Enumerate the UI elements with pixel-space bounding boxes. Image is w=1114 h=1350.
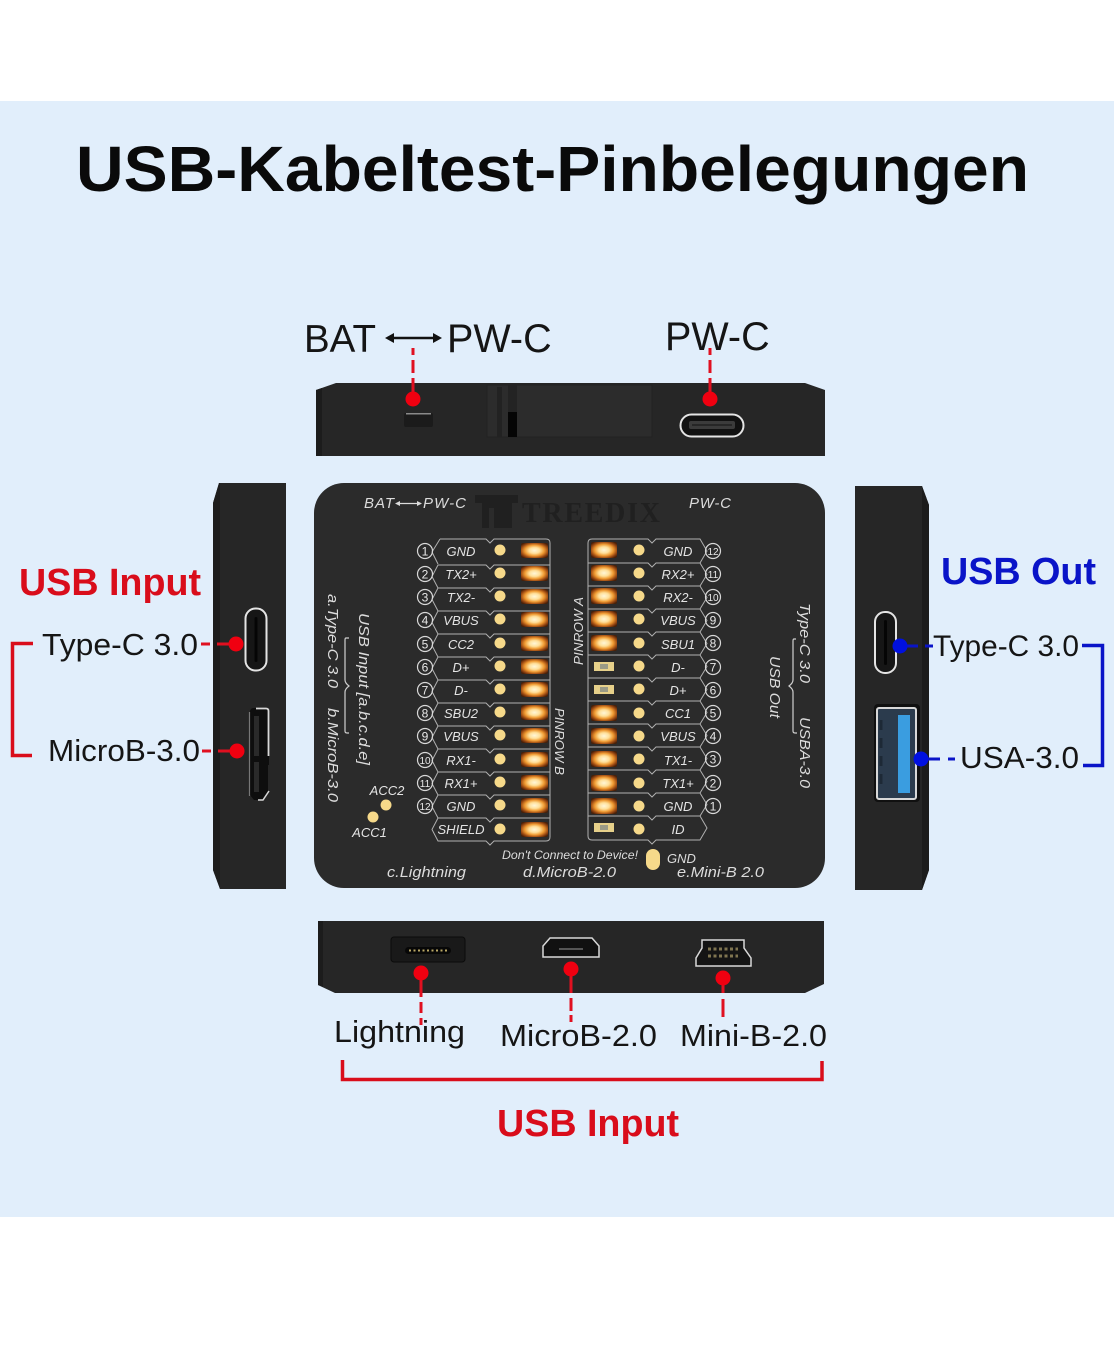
pin row: right 11 RX2+: RX2+ (662, 567, 695, 582)
pin row: right 8 SBU1 (591, 635, 720, 652)
test point: ACC2 (369, 783, 405, 810)
pin row: right 7 D- (LED off): 7 (710, 660, 717, 674)
pin row: left 7 D-: 7 (422, 684, 429, 698)
label: board BAT to PW-C (364, 495, 466, 512)
heading: USB Input left: USB Input (19, 561, 201, 603)
pin row: left 4 VBUS: 4 (422, 614, 429, 628)
pin row: left 7 D-: D- (454, 683, 469, 698)
callout: USA-3.0 marker (914, 752, 955, 766)
callout: switch marker (406, 348, 420, 406)
pin row: left 8 SBU2 (418, 705, 548, 721)
label: BAT to PW-C switch (304, 317, 552, 361)
pin row: right 6 D+ (LED off) (594, 682, 720, 698)
icon: right USB-C port (875, 612, 896, 673)
logo: TREEDIX (475, 495, 660, 529)
pin row: left 10 RX1- (418, 752, 548, 768)
pin row: left 8 SBU2: SBU2 (444, 706, 479, 721)
pin row: right 10 RX2-: 10 (707, 593, 719, 604)
bracket: board right (789, 639, 797, 733)
pin row: left 5 CC2: 5 (422, 638, 429, 652)
pin row: left 9 VBUS: VBUS (443, 729, 479, 744)
label: left MicroB-3.0: MicroB-3.0 (48, 733, 200, 768)
pin row: left 4 VBUS: VBUS (443, 613, 479, 628)
logo: TREEDIX: TREEDIX (522, 498, 660, 529)
pin row: right 1 GND: 1 (710, 800, 717, 814)
callout: Lightning marker (414, 966, 428, 1025)
icon: USB-A 3.0 port (874, 704, 920, 802)
text: warning: Don't Connect to Device! (502, 848, 639, 862)
pin row: right 1 GND (591, 798, 720, 814)
label: BAT to PW-C switch: BAT (304, 318, 376, 361)
pin row: right 11 RX2+: 11 (708, 570, 719, 581)
pin row: right 12 GND: 12 (707, 547, 719, 558)
pin row: right 2 TX1+ (591, 775, 720, 791)
pin row: right 5 CC1: 5 (710, 706, 717, 720)
pin row: right 5 CC1: CC1 (665, 706, 691, 721)
text: e.Mini-B 2.0: e.Mini-B 2.0 (677, 864, 765, 881)
pin row: right 9 VBUS: VBUS (660, 613, 696, 628)
pin row: right 6 D+ (LED off): 6 (710, 684, 717, 698)
pin row: left SHIELD: SHIELD (438, 822, 484, 837)
pin row: right 2 TX1+: 2 (710, 776, 717, 790)
panel: top side of device (316, 383, 825, 456)
pin row: right 5 CC1 (591, 705, 720, 721)
label: board PW-C: PW-C (689, 495, 731, 512)
heading: USB Input bottom: USB Input (497, 1102, 679, 1144)
text: board USB Out: USB Out (766, 656, 783, 719)
pin row: right 2 TX1+: TX1+ (662, 776, 694, 791)
text: PINROW A: PINROW A (571, 597, 586, 665)
test point: GND pad (646, 849, 660, 870)
icon: Micro-B 2.0 port (543, 938, 599, 957)
text: b.MicroB-3.0: b.MicroB-3.0 (324, 708, 341, 803)
pin row: left 6 D+: D+ (453, 660, 470, 675)
pin row: left 2 TX2+ (418, 566, 548, 582)
callout: Mini-B-2.0 marker (716, 970, 730, 1017)
pin row: left 9 VBUS (418, 728, 548, 744)
callout: MicroB-2.0 marker (564, 962, 578, 1022)
pin outline: right block (588, 539, 707, 844)
pin row: left 4 VBUS (418, 612, 548, 628)
pin row: left 8 SBU2: 8 (422, 706, 429, 720)
panel: right side of device (855, 486, 929, 890)
pin row: right 9 VBUS (591, 611, 720, 628)
pin row: right 8 SBU1: SBU1 (661, 637, 695, 652)
panel: left side of device (213, 483, 286, 889)
pin row: right 12 GND (591, 542, 720, 559)
pin row: left 1 GND (418, 543, 548, 559)
pin row: right 3 TX1-: TX1- (664, 753, 693, 768)
callout: PW-C marker (702, 348, 718, 406)
pin row: left 2 TX2+: 2 (422, 568, 429, 582)
heading: USB Out: USB Out (941, 550, 1096, 592)
label: PW-C: PW-C (665, 315, 770, 359)
pin row: left 12 GND: 12 (419, 802, 431, 813)
pin row: right 6 D+ (LED off): D+ (670, 683, 687, 698)
label: left Type-C 3.0: Type-C 3.0 (42, 627, 198, 662)
pin row: left 11 RX1+: RX1+ (445, 776, 478, 791)
icon: Micro-B 3.0 port (250, 708, 269, 800)
pin row: left 12 GND (418, 798, 548, 814)
pin row: left 3 TX2-: 3 (422, 590, 429, 604)
label: board BAT to PW-C: BAT (364, 495, 396, 512)
pin row: left 11 RX1+: 11 (420, 779, 431, 790)
test point: ACC1 (351, 812, 387, 840)
pin row: right 1 GND: GND (664, 799, 692, 814)
pin row: right ID (LED off) (594, 822, 684, 837)
bracket: bottom input (342, 1060, 822, 1080)
label: Lightning: Lightning (334, 1014, 465, 1049)
icon: battery switch (404, 413, 433, 427)
text: board Type-C 3.0: Type-C 3.0 (796, 603, 813, 684)
label: USA-3.0: USA-3.0 (960, 740, 1079, 775)
text: USB Input list: USB Input [a.b.c.d.e] (355, 613, 372, 766)
icon: left USB-C port (246, 608, 266, 670)
pin row: left 10 RX1-: RX1- (446, 753, 476, 768)
pin row: right 4 VBUS (591, 728, 720, 744)
pin outline: left block (432, 539, 550, 845)
pin row: left 5 CC2 (418, 636, 548, 652)
pin row: left 6 D+ (418, 659, 548, 675)
pin row: left 1 GND: 1 (422, 544, 429, 558)
label: board BAT to PW-C: PW-C (423, 495, 466, 512)
pin row: right 12 GND: GND (664, 544, 692, 559)
text: d.MicroB-2.0: d.MicroB-2.0 (523, 864, 617, 881)
label: MicroB-2.0: MicroB-2.0 (500, 1018, 657, 1053)
pin row: right 4 VBUS: 4 (710, 730, 717, 744)
label: BAT to PW-C switch: PW-C (447, 317, 552, 361)
pin row: left 1 GND: GND (447, 544, 475, 559)
label: Mini-B-2.0: Mini-B-2.0 (680, 1018, 827, 1053)
text: PINROW B: PINROW B (552, 708, 567, 775)
pin row: right 10 RX2-: RX2- (663, 590, 693, 605)
pin row: left 7 D- (418, 682, 548, 698)
pin row: left 12 GND: GND (447, 799, 475, 814)
pin row: right 11 RX2+ (591, 565, 720, 582)
title: USB-Kabeltest-Pinbelegungen (76, 133, 1029, 205)
callout: left Type-C marker (201, 636, 244, 652)
panel: bottom side of device (318, 921, 824, 993)
bracket: right output (1082, 646, 1102, 766)
pin row: left 10 RX1-: 10 (419, 756, 431, 767)
text: board USBA-3.0: USBA-3.0 (796, 717, 813, 789)
callout: MicroB-3.0 marker (202, 744, 244, 758)
pin row: right 3 TX1- (591, 751, 720, 768)
pin row: right 3 TX1-: 3 (710, 752, 717, 766)
pin row: right 8 SBU1: 8 (710, 636, 717, 650)
icon: Mini-B 2.0 port (696, 940, 751, 966)
pin row: right 10 RX2- (591, 588, 720, 605)
pin row: right 7 D- (LED off) (594, 660, 720, 675)
pin row: right ID (LED off): ID (672, 822, 684, 837)
label: right Type-C 3.0: Type-C 3.0 (933, 630, 1079, 663)
pin row: left 3 TX2-: TX2- (447, 590, 476, 605)
text: GND: GND (667, 851, 696, 866)
test point: ACC1: ACC1 (351, 825, 387, 840)
callout: right Type-C marker (892, 638, 933, 654)
panel: tester front board (314, 483, 825, 888)
pin row: left 9 VBUS: 9 (422, 730, 429, 744)
pin row: left 5 CC2: CC2 (448, 637, 475, 652)
pin row: left 6 D+: 6 (422, 660, 429, 674)
pin row: left 2 TX2+: TX2+ (445, 567, 477, 582)
pin row: right 4 VBUS: VBUS (660, 729, 696, 744)
test point: ACC2: ACC2 (369, 783, 405, 798)
icon: PW-C USB-C port (680, 414, 744, 436)
pin row: right 7 D- (LED off): D- (671, 660, 686, 675)
text: a.Type-C 3.0: a.Type-C 3.0 (324, 594, 341, 689)
bracket: left input (12, 644, 33, 756)
pin row: right 9 VBUS: 9 (710, 614, 717, 628)
bracket: board left (345, 638, 349, 733)
icon: Lightning port (391, 937, 465, 962)
pin row: left 11 RX1+ (418, 775, 548, 791)
pin row: left SHIELD (438, 822, 548, 837)
text: c.Lightning: c.Lightning (387, 864, 467, 881)
pin row: left 3 TX2- (418, 589, 548, 605)
